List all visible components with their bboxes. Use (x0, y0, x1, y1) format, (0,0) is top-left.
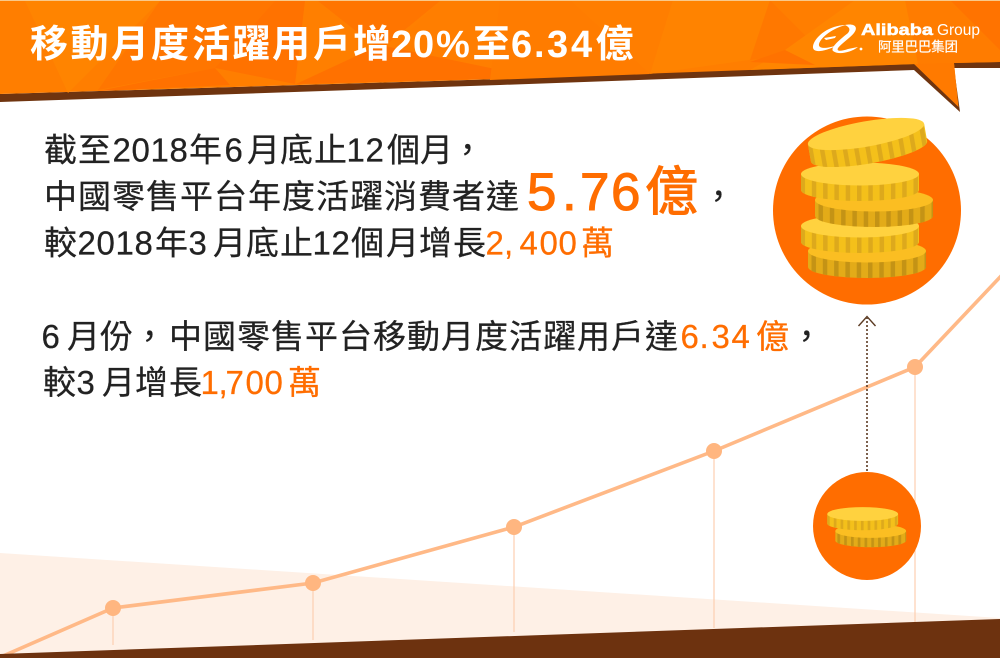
line 2: 較3月增長 (43, 364, 202, 401)
line 3 highlight: 2,400萬 (486, 224, 614, 262)
line chart (3, 274, 1000, 656)
line 1: 截至2018年6月底止12個月， (44, 132, 484, 168)
bottom band (0, 619, 1000, 658)
line 1 highlight: 6.34億 (680, 318, 789, 355)
line 3: 較2018年3月底止12個月增長 (44, 224, 486, 262)
title: 移動月度活躍用戶增20%至6.34億 (30, 24, 634, 66)
background wedge (0, 553, 1000, 658)
paragraph 2 (42, 318, 823, 401)
logo swoosh mark (813, 25, 862, 53)
highlight number: 5.76億 (527, 163, 698, 222)
line 1: 6月份，中國零售平台移動月度活躍用戶達 (42, 318, 678, 355)
logo: Alibaba Group (813, 22, 980, 54)
header banner (0, 0, 1000, 112)
icon: small coin stack (813, 472, 921, 580)
arrow: dotted up arrow (858, 316, 876, 471)
line 2 highlight: 1,700萬 (200, 364, 321, 401)
logo group word: Group (937, 22, 980, 39)
paragraph 1 (44, 132, 735, 262)
line 1 comma: ， (790, 318, 823, 355)
line 2 comma: ， (702, 178, 735, 215)
line 2: 中國零售平台年度活躍消費者達 (44, 178, 519, 215)
icon: large coin stack (773, 111, 961, 304)
logo wordmark: Alibaba (861, 22, 933, 39)
logo chinese name: 阿里巴巴集团 (878, 40, 958, 54)
